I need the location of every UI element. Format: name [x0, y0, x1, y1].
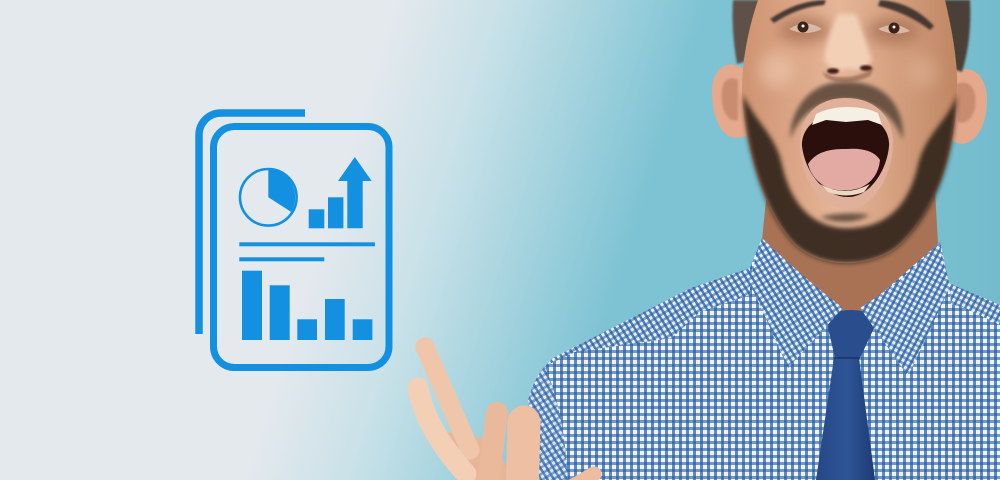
open mouth	[800, 98, 893, 209]
face	[742, 0, 957, 263]
pie chart	[240, 168, 297, 226]
hand fingers	[418, 347, 594, 480]
raised hand	[418, 347, 594, 480]
ears	[712, 65, 987, 144]
face shading	[759, 17, 938, 88]
upper teeth	[812, 107, 882, 125]
eyebrows	[770, 0, 934, 30]
hair	[732, 0, 970, 72]
lower teeth	[820, 184, 870, 196]
bar chart	[242, 271, 372, 340]
rising bars with arrow	[309, 157, 372, 228]
shirt body	[528, 238, 1000, 480]
tongue	[808, 149, 880, 190]
icon: report document with charts	[199, 113, 389, 368]
icon: back page outline	[199, 113, 305, 334]
hand palm	[446, 432, 514, 480]
photo: shouting man	[418, 0, 1000, 480]
collar	[749, 238, 950, 376]
nose	[822, 14, 874, 83]
tie	[816, 310, 875, 480]
icon: front page outline	[214, 126, 389, 368]
neck	[762, 190, 938, 320]
beard	[743, 82, 957, 263]
text lines	[239, 242, 375, 261]
eyes	[789, 22, 910, 34]
